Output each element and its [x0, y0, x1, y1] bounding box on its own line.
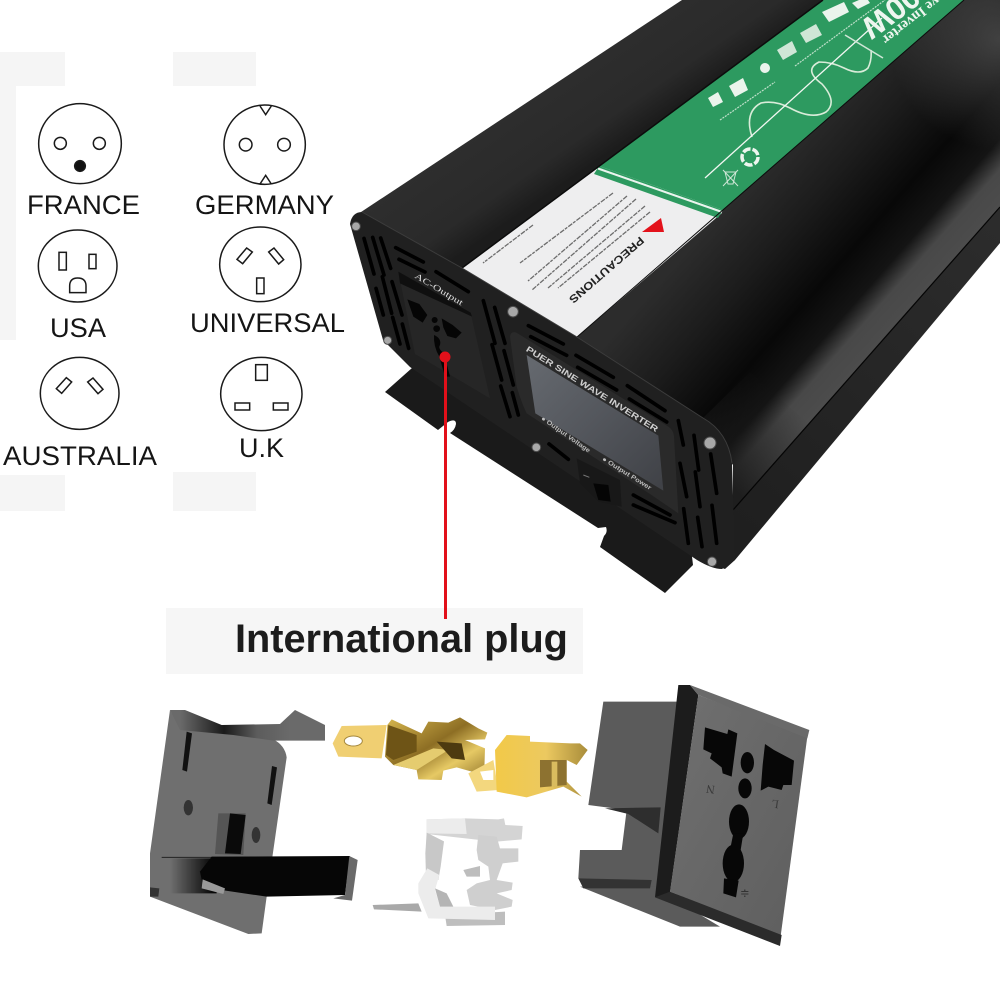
- power switch: [577, 458, 622, 507]
- label: GERMANY: GERMANY: [195, 190, 334, 220]
- label: FRANCE: FRANCE: [27, 190, 140, 220]
- lower arm: [200, 856, 350, 897]
- back bar: [445, 912, 505, 926]
- inverter unit: [350, 0, 1000, 593]
- lower bar: [418, 868, 495, 920]
- panel edge highlight: [362, 212, 732, 463]
- icon: recycling: [742, 149, 758, 165]
- socket terminal marks: N: [705, 782, 716, 797]
- AC output socket: [398, 271, 490, 398]
- mounting bracket: [385, 368, 693, 593]
- warning triangle: [642, 218, 664, 232]
- icon: Universal socket: [220, 227, 301, 302]
- sine wave graphic: [749, 50, 871, 137]
- shadow under arm: [170, 858, 217, 893]
- grey background patches: [0, 52, 256, 511]
- contact clip one: [385, 717, 487, 780]
- mounting slots: [182, 732, 277, 805]
- socket face side: [655, 685, 698, 897]
- output voltage label: ● Output Voltage: [540, 415, 592, 455]
- red line end over bar: [444, 600, 447, 619]
- center notch: [215, 813, 246, 855]
- icon: France socket: [39, 104, 121, 184]
- screw holes: [184, 800, 193, 815]
- contact bridge: [468, 760, 498, 792]
- exploded part: universal socket front: ≑: [740, 888, 749, 900]
- top bar: [427, 818, 523, 842]
- digital display: [510, 332, 678, 513]
- label: USA: USA: [50, 313, 106, 343]
- upper arm: [170, 710, 325, 741]
- display title: PUER SINE WAVE INVERTER: [524, 344, 660, 434]
- green label graphics: [705, 0, 983, 186]
- exploded part: universal socket front: L: [771, 797, 780, 812]
- socket rear block: [578, 702, 678, 897]
- contact clip two: [495, 735, 588, 797]
- left strut: [425, 833, 444, 880]
- label: white precautions area: [462, 170, 722, 337]
- solder tab: [373, 903, 422, 912]
- screws: [352, 222, 717, 566]
- front panel: [350, 212, 735, 569]
- small tab: [463, 866, 480, 877]
- lower side band: [700, 207, 1000, 569]
- precautions label content: [483, 193, 664, 305]
- label: U.K: U.K: [239, 433, 284, 463]
- label: AUSTRALIA: AUSTRALIA: [3, 441, 157, 471]
- contact tab: [333, 725, 387, 758]
- top face left of label: [352, 0, 825, 270]
- exploded part: plug rear housing: [150, 710, 358, 934]
- panel: plug type icons: [3, 104, 345, 471]
- feature icons: [708, 0, 870, 107]
- icon: UK socket: [221, 357, 302, 431]
- exploded part: silver earth contact: [373, 818, 523, 926]
- precautions heading: PRECAUTIONS: [566, 234, 646, 305]
- exploded part: universal socket front: [578, 685, 809, 946]
- output power label: ● Output Power: [601, 456, 653, 492]
- small print lines: [483, 193, 650, 290]
- pointer: red line from socket to heading: [440, 352, 450, 619]
- AC output text: AC-Output: [413, 271, 466, 308]
- exploded part: brass contacts: [333, 717, 588, 797]
- ventilation slots: [364, 237, 717, 547]
- icon: WEEE bin: [723, 170, 738, 186]
- right side face: [577, 0, 1000, 510]
- heading bar: [166, 608, 583, 674]
- right comb: [467, 835, 518, 910]
- label: green band: [599, 0, 964, 210]
- socket holes: [703, 727, 794, 897]
- icon: Australia socket: [40, 357, 119, 429]
- socket face: [670, 695, 807, 936]
- icon: Germany socket: [224, 105, 305, 184]
- heading: International plug: International plug: [235, 617, 568, 661]
- label: UNIVERSAL: UNIVERSAL: [190, 308, 345, 338]
- icon: USA socket: [38, 230, 117, 302]
